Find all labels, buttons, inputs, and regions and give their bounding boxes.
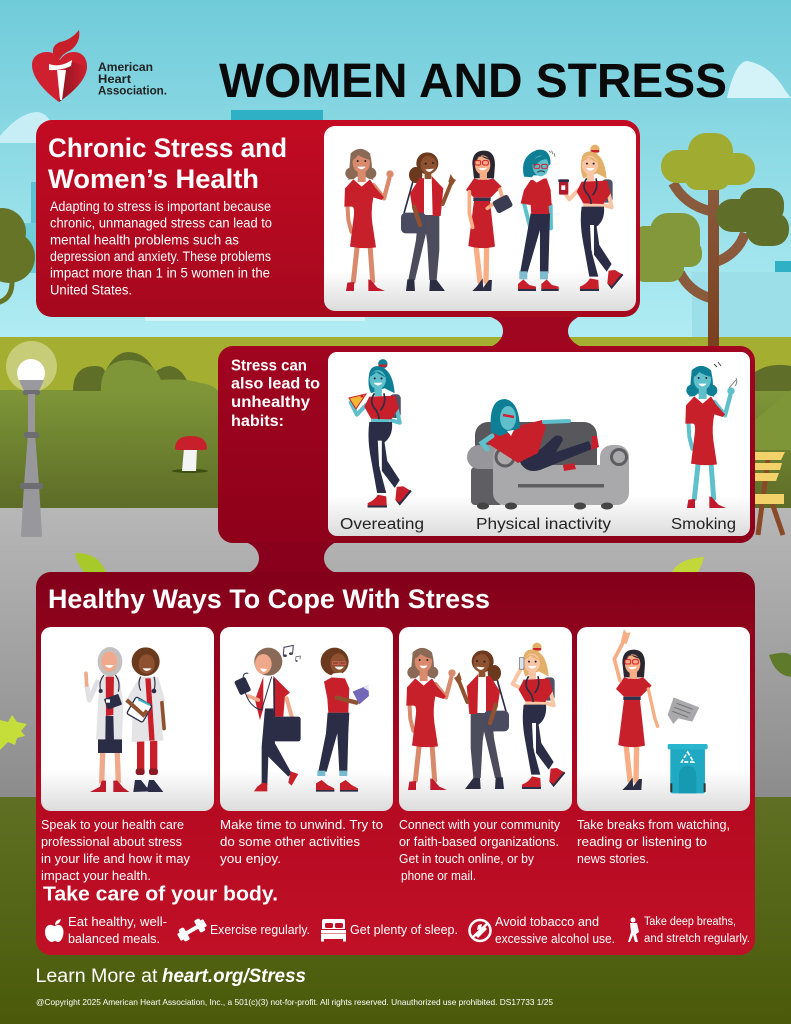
- text block: avoid tobacco: [495, 915, 615, 946]
- logo: American Heart Association: Association.: [98, 84, 167, 98]
- label: physical inactivity: Physical inactivity: [476, 516, 611, 533]
- icon: apple: [45, 919, 64, 942]
- logo: American Heart Association: Heart: [98, 72, 131, 86]
- text block: make time to unwind: do some other activities: [220, 834, 360, 849]
- heading: unhealthy habits: [231, 358, 320, 430]
- text block: connect with your community: Get in touch online, or by: [399, 851, 534, 866]
- text block: speak to your health care professional: [41, 817, 190, 883]
- text block: eat healthy: Eat healthy, well-: [68, 915, 167, 929]
- heading: unhealthy habits: also lead to: [231, 376, 320, 392]
- card: five women: [324, 126, 636, 311]
- text block: chronic stress body: depression and anxiety. These problems: [50, 249, 271, 264]
- card: connect with your community: [399, 627, 572, 811]
- text block: avoid tobacco: excessive alcohol use.: [495, 932, 615, 946]
- text block: chronic stress body: United States.: [50, 282, 132, 298]
- text: get plenty of sleep: Get plenty of sleep.: [350, 923, 458, 937]
- title: WOMEN AND STRESS: [219, 55, 727, 108]
- icon: no smoking or drinking: [470, 920, 490, 941]
- text block: make time to unwind: [220, 817, 383, 866]
- text block: speak to your health care professional: impact your health.: [41, 868, 151, 883]
- right tree: [636, 133, 789, 346]
- text block: make time to unwind: you enjoy.: [220, 851, 281, 866]
- text block: connect with your community: [399, 817, 560, 883]
- bushes: [73, 352, 791, 450]
- text block: eat healthy: [68, 915, 167, 946]
- text block: take breaks from news: reading or listening to: [577, 834, 707, 849]
- card: make time to unwind: [220, 627, 393, 811]
- heading: unhealthy habits: Stress can: [231, 358, 307, 374]
- figure: smoking: [685, 362, 737, 508]
- text block: deep breaths: Take deep breaths,: [644, 916, 736, 928]
- text block: connect with your community: phone or mail.: [401, 868, 476, 883]
- connector between second and third panel: [245, 542, 336, 573]
- logo: American Heart Association: [32, 30, 167, 102]
- heading: take care of your body: Take care of your body.: [43, 882, 278, 906]
- panel: stress can lead to unhealthy habits: [218, 346, 755, 543]
- text block: make time to unwind: Make time to unwind. Try to: [220, 817, 383, 832]
- figure: woman lying on sofa: [467, 399, 629, 510]
- label: overeating: Overeating: [340, 516, 424, 533]
- text block: speak to your health care professional: in your life and how it may: [41, 851, 190, 866]
- heading: unhealthy habits: habits:: [231, 413, 284, 430]
- heading: chronic stress: [48, 133, 287, 194]
- heading: chronic stress: Chronic Stress and: [48, 133, 287, 163]
- text block: chronic stress body: mental health problems such as: [50, 232, 239, 248]
- figure: overeating: [349, 359, 412, 508]
- heading: chronic stress: Women’s Health: [48, 164, 259, 194]
- icon: stretching person: [628, 918, 639, 942]
- card: take breaks from news: [577, 627, 750, 811]
- text block: take breaks from news: [577, 817, 730, 866]
- text block: chronic stress body: chronic, unmanaged stress can lead to: [50, 216, 272, 230]
- card: health care professionals: [41, 627, 214, 811]
- card: habits: [328, 352, 750, 536]
- footer: learn more: [36, 966, 306, 987]
- text block: speak to your health care professional: Speak to your health care: [41, 817, 184, 832]
- text: exercise regularly: Exercise regularly.: [210, 923, 310, 937]
- heading: unhealthy habits: unhealthy: [231, 394, 310, 411]
- icon: bed: [321, 919, 346, 942]
- panel: healthy ways to cope with stress: [36, 572, 755, 955]
- text block: take breaks from news: news stories.: [577, 851, 649, 866]
- heading: healthy ways: Healthy Ways To Cope With Stress: [48, 584, 490, 614]
- logo: American Heart Association: American: [98, 60, 153, 74]
- text block: chronic stress body: impact more than 1 in 5 women in the: [50, 266, 270, 280]
- leaves: [0, 553, 791, 750]
- street lamp: [6, 341, 57, 537]
- text block: deep breaths: [644, 916, 750, 945]
- text block: connect with your community: Connect with your community: [399, 817, 560, 832]
- text block: speak to your health care professional: professional about stress: [41, 834, 182, 849]
- panel: chronic stress and women's health: [36, 120, 640, 317]
- park bench: [755, 452, 785, 535]
- text block: avoid tobacco: Avoid tobacco and: [495, 915, 599, 929]
- text block: chronic stress body: Adapting to stress is important because: [50, 199, 271, 214]
- label: smoking: Smoking: [671, 516, 736, 533]
- text block: eat healthy: balanced meals.: [68, 932, 160, 946]
- left tree: [0, 208, 35, 303]
- text block: connect with your community: or faith-based organizations.: [399, 834, 559, 849]
- footer: copyright: @Copyright 2025 American Heart Association, Inc., a 501(c)(3) not-for-profit. All rights reserved. Unauthorized use prohibited. DS17733 1/25: [36, 997, 553, 1007]
- text block: take breaks from news: Take breaks from watching,: [577, 817, 730, 832]
- text block: deep breaths: and stretch regularly.: [644, 933, 750, 945]
- connector between first and second panel: [488, 316, 582, 347]
- footer: learn more: heart.org/Stress: [162, 966, 306, 987]
- icon: dumbbell: [176, 916, 208, 944]
- mushroom: [172, 436, 208, 473]
- footer: learn more: Learn More at: [36, 966, 158, 987]
- text block: chronic stress body: [50, 199, 272, 298]
